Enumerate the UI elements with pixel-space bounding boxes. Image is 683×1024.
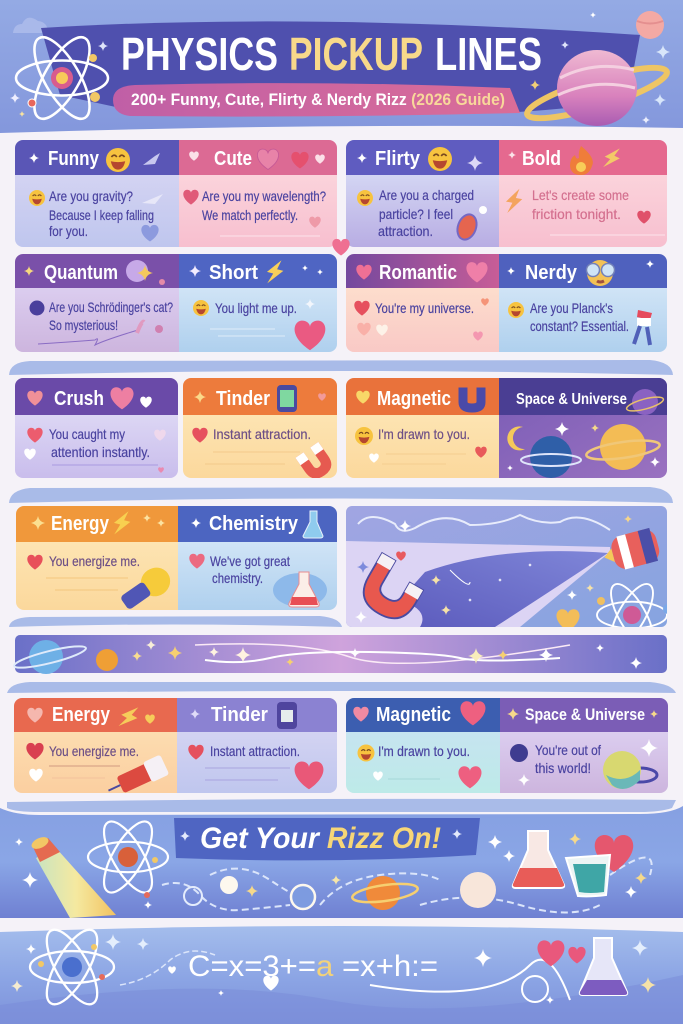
icon: laughing emoji [106, 148, 130, 172]
icon: center heart [332, 239, 350, 256]
group: Magnetic and Space second cards [346, 698, 668, 793]
card: Cute: Cute [214, 148, 252, 170]
card: Short [179, 254, 337, 352]
subtitle pill [113, 83, 520, 117]
icon: phone [277, 385, 297, 412]
card: Bold: friction tonight. [532, 206, 621, 222]
card: Bold [499, 140, 667, 247]
icon: quantum orb [126, 260, 165, 285]
card: Energy second: Energy [52, 704, 111, 726]
card: Nerdy: constant? Essential. [530, 318, 629, 334]
card: Funny: Are you gravity? [49, 188, 133, 204]
decorative strip [13, 635, 667, 674]
header [10, 11, 671, 128]
header background [0, 0, 683, 170]
icon: pink heart [466, 262, 488, 282]
content sheet [0, 126, 683, 815]
icon: red flashlight [104, 754, 169, 801]
icon: hearts [257, 149, 325, 169]
divider band [7, 799, 676, 812]
icon: orange planet [351, 876, 419, 910]
formula: C=x=3+=a =x+h:= [188, 950, 438, 983]
card: Bold: Bold [522, 148, 561, 170]
icon: red flask [289, 572, 319, 607]
card: Flirty: Flirty [375, 148, 421, 170]
card: Nerdy [499, 254, 667, 352]
card: Energy second [14, 698, 177, 801]
card: Tinder second: Instant attraction. [210, 743, 300, 759]
icon: dark planet [510, 744, 528, 762]
group: Funny and Cute cards [15, 140, 337, 247]
card: Romantic: Romantic [379, 262, 457, 284]
icon: blue planet [521, 436, 581, 478]
icon: particle [456, 213, 478, 241]
icon: footer atom [88, 815, 168, 899]
title ribbon [41, 21, 640, 112]
card: Flirty: particle? I feel [379, 206, 453, 222]
card: Space second: this world! [535, 760, 591, 776]
card: Energy: You energize me. [49, 553, 140, 569]
icon: purple flask [580, 938, 627, 995]
card: Crush: Crush [54, 388, 104, 410]
divider band [7, 682, 676, 693]
icon: grinning emoji [193, 300, 209, 316]
cta text: Get Your Rizz On! [200, 822, 441, 855]
separator [0, 918, 683, 932]
card: Short: Short [209, 262, 258, 284]
group: Flirty and Bold cards [346, 140, 667, 247]
card: Quantum: Are you Schrödinger's cat? [49, 299, 173, 315]
icon: ring ball [291, 885, 315, 909]
card: Energy second: You energize me. [49, 743, 139, 759]
title accent: PICKUP [289, 28, 423, 80]
card: Flirty [346, 140, 499, 247]
icon: orange ball [96, 649, 118, 671]
divider band [9, 360, 673, 375]
title: PHYSICS [121, 28, 278, 80]
card: Short: You light me up. [215, 300, 297, 316]
card: Tinder second [177, 698, 337, 793]
icon: lightning bolt [267, 260, 284, 284]
card: Funny: for you. [49, 223, 88, 239]
card: Magnetic: I'm drawn to you. [378, 426, 470, 442]
icon: prism beam [30, 835, 116, 918]
icon: gold bolt [116, 702, 142, 732]
icon: big heart [295, 762, 323, 789]
icon: white ball [220, 876, 238, 894]
group: Energy and Chemistry cards [16, 506, 337, 615]
icon: red heart [595, 835, 633, 872]
icon: beaker [566, 855, 610, 896]
card: Magnetic: Magnetic [377, 388, 451, 410]
card: Quantum [15, 254, 179, 352]
icon: panel atom [597, 578, 673, 652]
card: Flirty: attraction. [378, 223, 433, 239]
card: Magnetic [346, 378, 499, 478]
icon: horseshoe magnet [296, 442, 332, 478]
icon: formula atom [30, 923, 114, 1011]
icon: horseshoe magnet [355, 553, 429, 627]
icon: colourful planet [603, 751, 657, 789]
icon: atom [16, 29, 108, 127]
icon: red flask [513, 831, 564, 888]
icon: rocket [600, 527, 662, 574]
group: Magnetic and Space cards [346, 378, 667, 478]
icon: grey phone [277, 702, 297, 729]
card: Cute [179, 140, 337, 247]
card: Bold: Let's create some [532, 187, 629, 203]
card: Quantum: So mysterious! [49, 317, 118, 333]
icon: gold heart [556, 609, 580, 631]
icon: smiling emoji [358, 744, 374, 762]
group: Romantic and Nerdy cards [346, 254, 667, 352]
formula scene [0, 923, 683, 1024]
subtitle: 200+ Funny, Cute, Flirty & Nerdy Rizz (2026 Guide) [131, 90, 505, 109]
icon: heart [460, 701, 486, 725]
card: Funny [15, 140, 179, 247]
card: Chemistry: Chemistry [209, 513, 299, 535]
icon: magnet [459, 388, 485, 412]
panel: magnet and rocket illustration [346, 506, 673, 652]
card: Magnetic second: Magnetic [376, 704, 451, 726]
title end: LINES [435, 28, 542, 80]
card: Space and Universe: Space & Universe [516, 391, 627, 408]
divider band [9, 487, 673, 503]
icon: crescent moon [507, 426, 525, 450]
card: Crush: attention instantly. [51, 444, 150, 460]
card: Energy [16, 506, 178, 615]
card: Cute: Are you my wavelength? [202, 188, 326, 204]
card: Energy: Energy [51, 513, 110, 535]
card: Tinder second: Tinder [211, 704, 268, 726]
cta ribbon [174, 818, 480, 860]
icon: crush heart [110, 387, 134, 409]
icon: heart eyes emoji [355, 427, 373, 445]
card: Romantic: You're my universe. [375, 300, 474, 316]
icon: yellow planet [585, 424, 661, 470]
icon: flashlight [116, 562, 176, 615]
card: Tinder: Tinder [216, 388, 270, 410]
cloud [13, 18, 48, 33]
card: Cute: We match perfectly. [202, 207, 298, 223]
card: Space second: You're out of [535, 742, 601, 758]
card: Flirty: Are you a charged [379, 187, 474, 203]
icon: lightning [111, 508, 133, 538]
icon: cream ball [460, 872, 496, 908]
icon: winking emoji [428, 147, 452, 171]
icon: small magnet [634, 310, 652, 345]
card: Funny: Funny [48, 148, 100, 170]
group: Quantum and Short cards [15, 254, 337, 352]
card: Crush [15, 378, 178, 478]
card: Chemistry [178, 506, 337, 610]
icon: flame [570, 146, 593, 175]
icon: blue ringed planet [13, 640, 87, 674]
card: Space second: Space & Universe [525, 705, 645, 724]
card: Chemistry: We've got great [210, 553, 290, 569]
card: Magnetic second: I'm drawn to you. [378, 743, 470, 759]
footer scene [0, 806, 683, 918]
icon: ringed planet [523, 11, 671, 128]
icon: large heart [295, 321, 325, 350]
card: Romantic [346, 254, 499, 352]
card: Tinder: Instant attraction. [213, 426, 311, 442]
icon: blue flask [303, 511, 323, 538]
icon: purple planet [625, 389, 665, 415]
icon: lightning [603, 148, 620, 167]
card: Nerdy: Nerdy [525, 262, 578, 284]
card: Chemistry: chemistry. [212, 570, 263, 586]
group: Energy and Tinder cards [14, 698, 337, 801]
card: Nerdy: Are you Planck's [530, 300, 613, 316]
card: Magnetic second [346, 698, 500, 793]
icon: nerd emoji [586, 260, 614, 286]
icon: heart pair [538, 940, 586, 966]
divider band [9, 616, 342, 627]
card: Crush: You caught my [49, 426, 125, 442]
card: Space and Universe [499, 378, 667, 478]
card: Quantum: Quantum [44, 262, 118, 284]
card: Funny: Because I keep falling [49, 207, 154, 223]
card: Tinder [183, 378, 337, 483]
card: Space second [500, 698, 668, 793]
